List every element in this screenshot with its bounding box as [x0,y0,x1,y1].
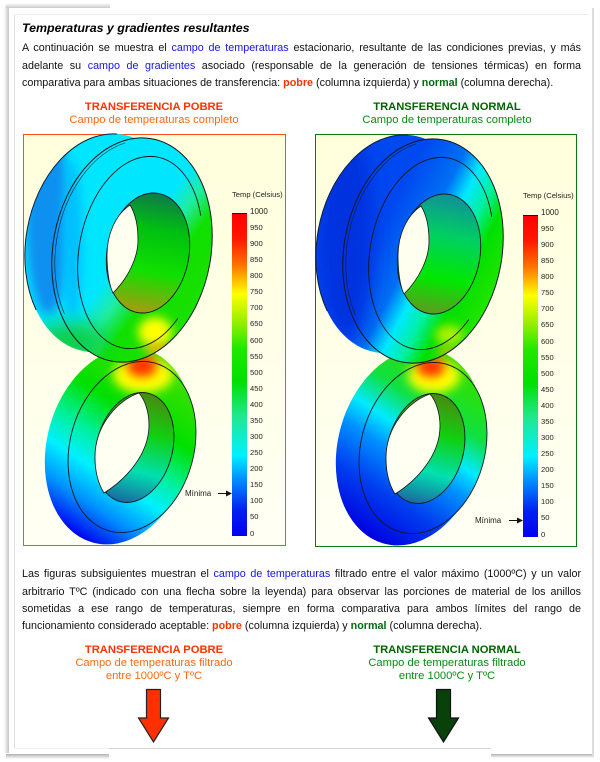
legend: temperature colour scale [523,191,574,539]
legend: temperature colour scale: 900 [250,239,263,248]
legend: temperature colour scale: 800 [250,271,263,280]
legend: temperature colour scale: 500 [250,368,263,377]
legend: temperature colour scale: 450 [250,384,263,393]
panel frame [24,134,286,546]
heading: filtrado, transferencia pobre: TRANSFERENCIA POBRE [85,644,223,656]
legend: temperature colour scale: 600 [541,337,554,346]
panel frame [316,134,576,546]
title: Temperaturas y gradientes resultantes [22,21,249,35]
second paragraph: funcionamiento considerado aceptable: pobre (columna izquierda) y normal (columna derecha). [22,620,482,632]
heading: transferencia pobre: Campo de temperaturas completo [69,114,239,126]
legend: temperature colour scale: 650 [250,319,263,328]
intro paragraph: A continuación se muestra el campo de temperaturas estacionario, resultante de las condiciones previas, y más [22,42,581,54]
legend: temperature colour scale: 550 [250,352,263,361]
arrow: mínima: Mínima [475,516,502,525]
second paragraph: arbitrario TºC (indicado con una flecha sobre la leyenda) para observar las porciones de material de los anillos [22,586,581,598]
legend: temperature colour scale: 200 [541,465,554,474]
legend: temperature colour scale: 50 [541,513,549,522]
legend: temperature colour scale: Temp (Celsius) [232,190,283,199]
legend: temperature colour scale: 600 [250,336,263,345]
legend: temperature colour scale: 200 [250,464,263,473]
legend: temperature colour scale: 500 [541,369,554,378]
legend: temperature colour scale: 400 [250,400,263,409]
legend: temperature colour scale: 250 [541,449,554,458]
panel: campo completo, transferencia pobre [23,133,286,546]
heading: filtrado, transferencia pobre: Campo de temperaturas filtrado [75,657,233,669]
legend: temperature colour scale: 850 [541,256,554,265]
legend: temperature colour scale: 450 [541,385,554,394]
legend: temperature colour scale [232,190,283,538]
arrow: mínima [475,516,523,525]
legend: temperature colour scale: 0 [541,530,545,539]
intro paragraph: comparativa para ambas situaciones de transferencia: pobre (columna izquierda) y normal (columna derecha). [22,77,553,89]
heading: filtrado, transferencia normal: TRANSFERENCIA NORMAL [373,644,521,656]
legend: temperature colour scale: 700 [250,303,263,312]
legend: temperature colour scale: 950 [541,224,554,233]
legend: temperature colour scale: Temp (Celsius) [523,191,574,200]
second paragraph: sometidas a ese rango de temperaturas, siempre en forma comparativa para ambos límites del rango de [22,603,581,615]
legend: temperature colour scale: 1000 [541,208,559,217]
arrow: mínima: Mínima [185,489,212,498]
legend: temperature colour scale: 900 [541,240,554,249]
upper ring [24,133,213,363]
legend: temperature colour scale: 150 [541,481,554,490]
heading: filtrado, transferencia normal: entre 1000ºC y TºC [399,670,495,682]
legend: temperature colour scale: 850 [250,255,263,264]
arrow: dark green down [428,688,460,743]
upper ring [315,134,504,364]
legend: temperature colour scale: 0 [250,529,254,538]
second paragraph: Las figuras subsiguientes muestran el campo de temperaturas filtrado entre el valor máximo (1000ºC) y un valor [22,568,581,580]
intro paragraph [22,42,581,89]
legend: temperature colour scale: 950 [250,223,263,232]
legend: temperature colour scale: 300 [250,432,263,441]
legend: temperature colour scale: 350 [541,417,554,426]
legend: temperature colour scale: 100 [250,496,263,505]
heading: transferencia normal [362,101,532,126]
legend: temperature colour scale: 750 [541,288,554,297]
arrow: red down [138,688,170,743]
legend: temperature colour scale: 700 [541,304,554,313]
panel: campo completo, transferencia normal [315,134,577,547]
heading: transferencia pobre [69,101,239,126]
legend: temperature colour scale: 1000 [250,207,268,216]
heading: transferencia normal: TRANSFERENCIA NORMAL [373,101,521,113]
legend: temperature colour scale: 400 [541,401,554,410]
heading: filtrado, transferencia normal: Campo de temperaturas filtrado [368,657,526,669]
legend: temperature colour scale: 250 [250,448,263,457]
heading: filtrado, transferencia normal [368,644,526,682]
second paragraph [22,568,581,632]
heading: transferencia normal: Campo de temperaturas completo [362,114,532,126]
legend: temperature colour scale: 100 [541,497,554,506]
heading: transferencia pobre: TRANSFERENCIA POBRE [85,101,223,113]
heading: filtrado, transferencia pobre: entre 1000ºC y TºC [106,670,202,682]
legend: temperature colour scale: 800 [541,272,554,281]
arrow: mínima [185,489,232,498]
heading: filtrado, transferencia pobre [75,644,233,682]
legend: temperature colour scale: 550 [541,353,554,362]
legend: temperature colour scale: 50 [250,512,258,521]
legend: temperature colour scale: 650 [541,320,554,329]
legend: temperature colour scale: 300 [541,433,554,442]
legend: temperature colour scale: 750 [250,287,263,296]
lower ring [336,354,488,546]
intro paragraph: adelante su campo de gradientes asociado (responsable de la generación de tensiones térmicas) en forma [22,60,581,72]
lower ring [44,353,196,544]
legend: temperature colour scale: 350 [250,416,263,425]
legend: temperature colour scale: 150 [250,480,263,489]
